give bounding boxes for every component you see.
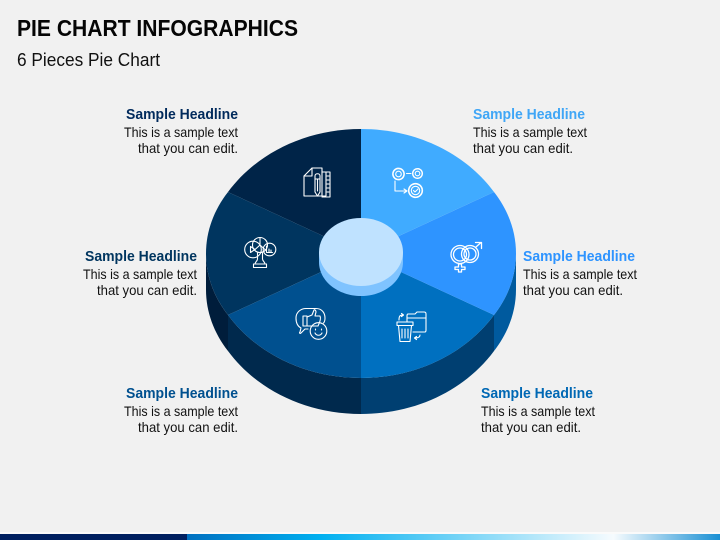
text: top left: that you can edit.	[138, 140, 238, 156]
center hub side	[319, 252, 403, 296]
slice: bottom left	[228, 254, 361, 378]
slice: right	[361, 192, 516, 315]
icon: thumbs up with smile	[296, 308, 327, 339]
icon: gears process	[393, 168, 422, 197]
icon: gender symbols	[451, 242, 482, 272]
side: bottom right	[361, 315, 494, 414]
text: right	[523, 249, 637, 298]
slice: top right	[361, 129, 494, 254]
text: left	[83, 249, 197, 298]
text: top right	[473, 107, 587, 156]
text: top right: This is a sample text	[473, 124, 587, 140]
side: bottom left	[228, 315, 361, 414]
subtitle: 6 Pieces Pie Chart	[17, 49, 160, 70]
side: left	[206, 254, 228, 351]
text: left: that you can edit.	[97, 282, 197, 298]
text: top left	[124, 107, 238, 156]
icon: trash and browser window	[397, 312, 426, 342]
slice: bottom right	[361, 254, 494, 378]
text: bottom right	[481, 386, 595, 435]
text: bottom left	[124, 386, 238, 435]
icon: three circles on a stand	[245, 238, 276, 268]
slice: left	[206, 192, 361, 315]
side: right	[494, 254, 516, 351]
text: bottom left: This is a sample text	[124, 403, 238, 419]
text: bottom left: Sample Headline	[126, 386, 238, 402]
text: top right: that you can edit.	[473, 140, 573, 156]
text: left: Sample Headline	[85, 249, 197, 265]
icon: document, pencil and ruler	[304, 168, 330, 197]
text: right: that you can edit.	[523, 282, 623, 298]
text: top left: This is a sample text	[124, 124, 238, 140]
text: top right: Sample Headline	[473, 107, 585, 123]
center hub top	[319, 218, 403, 286]
text: bottom right: that you can edit.	[481, 419, 581, 435]
text: top left: Sample Headline	[126, 107, 238, 123]
slice: top left	[228, 129, 361, 254]
text: bottom left: that you can edit.	[138, 419, 238, 435]
text: right: Sample Headline	[523, 249, 635, 265]
footer bar	[0, 532, 720, 540]
text: right: This is a sample text	[523, 266, 637, 282]
text: bottom right: Sample Headline	[481, 386, 593, 402]
title: PIE CHART INFOGRAPHICS	[17, 15, 298, 41]
text: bottom right: This is a sample text	[481, 403, 595, 419]
text: left: This is a sample text	[83, 266, 197, 282]
pie chart	[206, 129, 516, 414]
